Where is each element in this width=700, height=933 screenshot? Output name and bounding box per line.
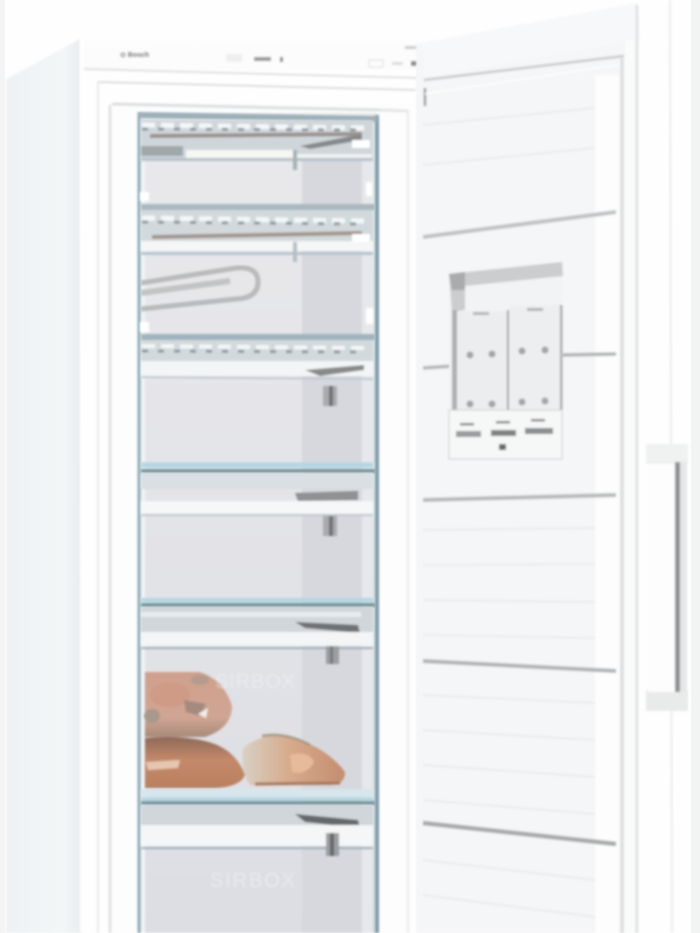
right food chart card bbox=[510, 306, 560, 412]
door storage card pocket bbox=[449, 262, 563, 459]
shelf 2 wire rack bbox=[141, 204, 375, 262]
freezer interior frame bbox=[110, 103, 410, 933]
watermark upper: SIRBOX bbox=[215, 671, 295, 693]
drawer 5 glass base bbox=[141, 789, 375, 805]
shelf 1 wire rack bbox=[140, 120, 373, 201]
door shelf ribs bbox=[423, 212, 616, 844]
brand logo: ⊙ Bosch bbox=[120, 52, 149, 59]
door handle bbox=[646, 444, 688, 711]
shelf 3 with basket bbox=[141, 334, 375, 473]
frozen bread loaves bbox=[144, 672, 345, 788]
freezer cavity back wall bbox=[139, 113, 377, 933]
shelf 6 drawer top bbox=[141, 805, 373, 856]
watermark lower: SIRBOX bbox=[210, 870, 295, 892]
heating coil bbox=[140, 268, 373, 332]
pocket label strip bbox=[449, 410, 562, 459]
left food chart card bbox=[457, 312, 507, 412]
shelf 5 drawer top bbox=[141, 607, 373, 664]
upper bread loaf bbox=[145, 672, 232, 737]
cavity side rails bbox=[139, 112, 377, 933]
top control panel bbox=[84, 41, 419, 933]
right bread loaf bbox=[242, 736, 345, 785]
open door bbox=[416, 0, 672, 933]
shelf 4 with basket bbox=[141, 473, 375, 607]
control display bbox=[226, 46, 419, 67]
lower bread loaf bbox=[145, 737, 245, 788]
freezer side panel bbox=[6, 39, 84, 933]
door panel texture lines bbox=[423, 108, 595, 917]
freezer body front bbox=[80, 39, 419, 933]
